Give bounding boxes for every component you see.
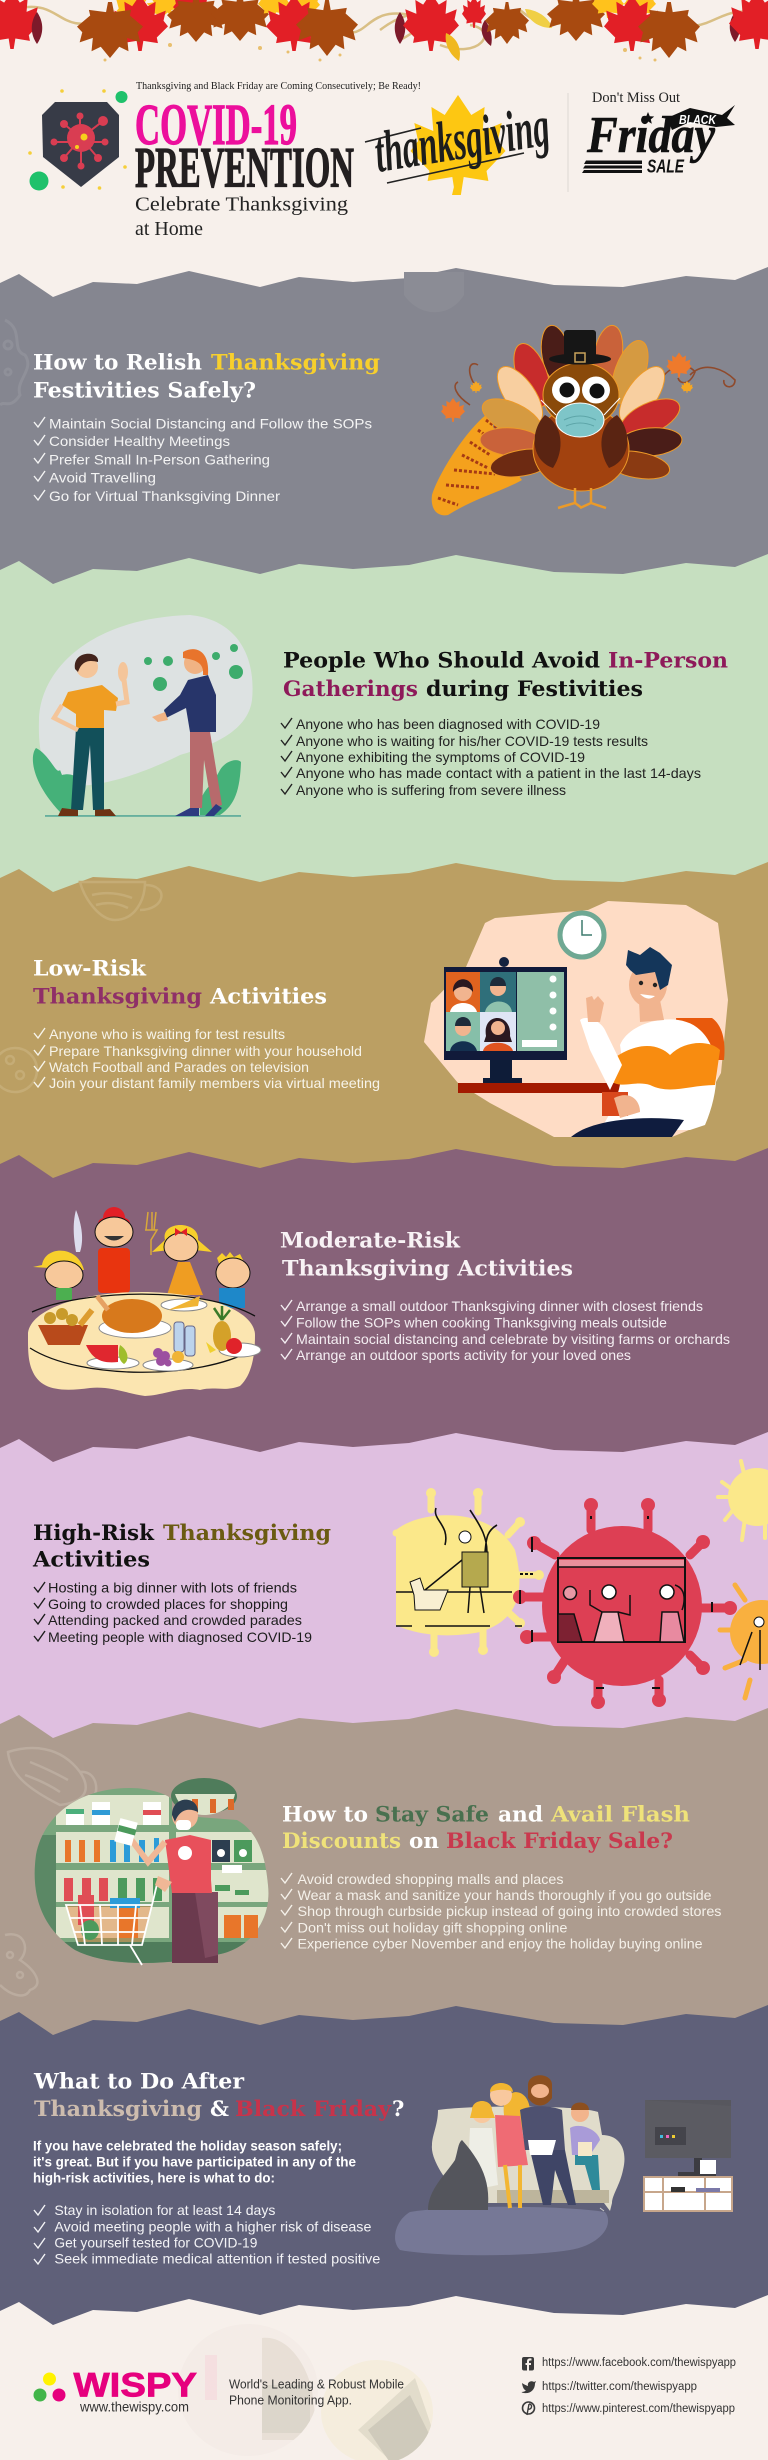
panel: header background xyxy=(0,0,768,300)
panel: low-risk activities xyxy=(0,862,768,1178)
checklist xyxy=(281,1298,730,1363)
heading: People Who Should Avoid xyxy=(283,648,600,673)
checklist: Anyone who is waiting for test results xyxy=(49,1026,285,1042)
checklist: Attending packed and crowded parades xyxy=(48,1612,302,1628)
heading: Discounts xyxy=(282,1828,401,1853)
heading: Stay Safe xyxy=(375,1802,489,1827)
logo: Wispy: www.thewispy.com xyxy=(79,2399,189,2415)
heading: How to Relish xyxy=(33,349,202,374)
checklist: Stay in isolation for at least 14 days xyxy=(54,2202,275,2218)
heading: on xyxy=(409,1828,439,1853)
panel: high-risk activities xyxy=(0,1432,768,1738)
heading: and xyxy=(498,1802,543,1827)
title: COVID-19 Prevention: COVID-19 xyxy=(135,92,297,157)
heading: Thanksgiving Activities xyxy=(282,1256,573,1281)
heading: Avail Flash xyxy=(550,1802,690,1827)
checklist: Maintain Social Distancing and Follow the SOPs xyxy=(49,415,372,431)
heading: & xyxy=(210,2096,229,2121)
checklist: Anyone who is suffering from severe illness xyxy=(296,782,566,798)
checklist: Shop through curbside pickup instead of going into crowded stores xyxy=(298,1903,722,1919)
checklist: Avoid meeting people with a higher risk of disease xyxy=(54,2219,372,2235)
checklist: Prepare Thanksgiving dinner with your household xyxy=(49,1043,362,1059)
Black Friday Sale logo: BLACK xyxy=(679,112,717,127)
heading: What to Do After xyxy=(33,2068,245,2093)
checklist: Maintain social distancing and celebrate by visiting farms or orchards xyxy=(296,1331,730,1347)
illustration: sun virus and walker xyxy=(396,1461,768,1709)
social links xyxy=(522,2357,736,2415)
heading: Activities xyxy=(209,983,327,1008)
heading: In-Person xyxy=(608,648,728,673)
illustration: family on sofa watching TV xyxy=(395,2075,732,2255)
title: COVID-19 Prevention: PREVENTION xyxy=(135,137,354,200)
subtitle: at Home xyxy=(135,218,203,240)
checklist: Seek immediate medical attention if tested positive xyxy=(54,2251,381,2267)
heading: Black Friday xyxy=(235,2096,392,2121)
checklist: Get yourself tested for COVID-19 xyxy=(54,2235,258,2251)
heading: Festivities Safely? xyxy=(33,378,256,403)
heading: Thanksgiving xyxy=(163,1520,331,1545)
checklist: Avoid crowded shopping malls and places xyxy=(298,1871,564,1887)
panel: stay safe and avail discounts xyxy=(0,1708,768,2035)
heading: Low-Risk xyxy=(33,956,146,981)
heading: Gatherings xyxy=(283,676,418,701)
heading xyxy=(33,956,327,1008)
tagline: Phone Monitoring App. xyxy=(229,2393,352,2408)
checklist xyxy=(34,2202,381,2267)
checklist: Going to crowded places for shopping xyxy=(48,1596,288,1612)
checklist: Join your distant family members via virtual meeting xyxy=(49,1075,380,1091)
Black Friday Sale logo: SALE xyxy=(647,156,685,176)
subtitle: Celebrate Thanksgiving xyxy=(135,194,348,216)
checklist xyxy=(34,1580,312,1645)
checklist: Follow the SOPs when cooking Thanksgiving meals outside xyxy=(296,1314,667,1330)
text: don't miss out: Don't Miss Out xyxy=(592,90,680,106)
illustration: turkey with mask xyxy=(432,323,735,515)
tagline: Thanksgiving and Black Friday are Coming Consecutively; Be Ready! xyxy=(136,80,421,92)
checklist: Meeting people with diagnosed COVID-19 xyxy=(48,1629,312,1645)
checklist: Wear a mask and sanitize your hands thoroughly if you go outside xyxy=(298,1887,712,1903)
heading: How to xyxy=(282,1802,368,1827)
heading xyxy=(33,349,380,403)
background photo circles xyxy=(205,2338,433,2460)
Thanksgiving logo xyxy=(365,93,554,195)
Black Friday Sale logo: Friday xyxy=(586,107,716,164)
checklist: Prefer Small In-Person Gathering xyxy=(49,451,270,467)
heading: Black Friday Sale? xyxy=(446,1828,673,1853)
checklist: Go for Virtual Thanksgiving Dinner xyxy=(49,488,280,504)
panel: moderate-risk activities xyxy=(0,1148,768,1462)
illustration: masked shopper in supermarket xyxy=(30,1778,276,1968)
icon: virus shield xyxy=(28,89,128,190)
panel: how to relish xyxy=(0,267,768,584)
heading xyxy=(283,648,728,701)
panel: people who should avoid xyxy=(0,554,768,892)
heading: during Festivities xyxy=(426,676,643,701)
checklist xyxy=(34,415,372,504)
heading: Moderate-Risk xyxy=(280,1227,460,1252)
intro paragraph: it's great. But if you have participated in any of the xyxy=(33,2154,356,2170)
heading: High-Risk xyxy=(33,1520,154,1545)
checklist: Watch Football and Parades on television xyxy=(49,1059,309,1075)
checklist xyxy=(281,1871,722,1952)
illustration: family at dinner table xyxy=(28,1207,261,1396)
checklist: Anyone who is waiting for his/her COVID-19 tests results xyxy=(296,733,648,749)
checklist: Arrange an outdoor sports activity for your loved ones xyxy=(296,1347,631,1363)
logo: Wispy xyxy=(34,2367,197,2415)
checklist: Arrange a small outdoor Thanksgiving dinner with closest friends xyxy=(296,1298,703,1314)
panel: what to do after xyxy=(0,2005,768,2325)
subtitle xyxy=(135,194,348,240)
intro paragraph: If you have celebrated the holiday season safely; xyxy=(33,2138,342,2154)
tagline: World's Leading & Robust Mobile xyxy=(229,2377,404,2392)
Thanksgiving logo: thanksgiving xyxy=(370,93,554,185)
checklist xyxy=(281,716,701,798)
social links: https://www.facebook.com/thewispyapp xyxy=(542,2357,736,2369)
heading: Thanksgiving xyxy=(33,983,202,1008)
intro paragraph xyxy=(33,2138,356,2186)
checklist: Don't miss out holiday gift shopping online xyxy=(298,1920,568,1936)
checklist: Experience cyber November and enjoy the holiday buying online xyxy=(298,1936,703,1952)
checklist: Consider Healthy Meetings xyxy=(49,433,230,449)
heading xyxy=(282,1802,690,1853)
checklist xyxy=(34,1026,380,1091)
checklist: Anyone exhibiting the symptoms of COVID-19 xyxy=(296,749,585,765)
title: COVID-19 Prevention xyxy=(135,92,354,200)
checklist: Anyone who has made contact with a patient in the last 14-days xyxy=(296,765,701,781)
heading xyxy=(33,2068,404,2121)
intro paragraph: high-risk activities, here is what to do: xyxy=(33,2170,275,2186)
social links: https://twitter.com/thewispyapp xyxy=(542,2381,697,2393)
heading xyxy=(280,1227,573,1281)
panel: footer xyxy=(0,2295,768,2460)
tagline xyxy=(229,2377,404,2408)
illustration: two people with virus xyxy=(33,615,253,817)
heading: Thanksgiving xyxy=(211,349,380,374)
heading: ? xyxy=(392,2096,404,2121)
logo: Wispy: WISPY xyxy=(74,2367,197,2405)
checklist: Avoid Travelling xyxy=(49,469,156,485)
illustration: video call xyxy=(424,901,728,1137)
social links: https://www.pinterest.com/thewispyapp xyxy=(542,2403,735,2415)
heading: Thanksgiving xyxy=(34,2096,202,2121)
heading: Activities xyxy=(32,1547,150,1572)
checklist: Anyone who has been diagnosed with COVID-19 xyxy=(296,716,600,732)
checklist: Hosting a big dinner with lots of friends xyxy=(48,1580,297,1596)
heading xyxy=(32,1520,331,1572)
autumn leaf garland xyxy=(0,0,768,62)
